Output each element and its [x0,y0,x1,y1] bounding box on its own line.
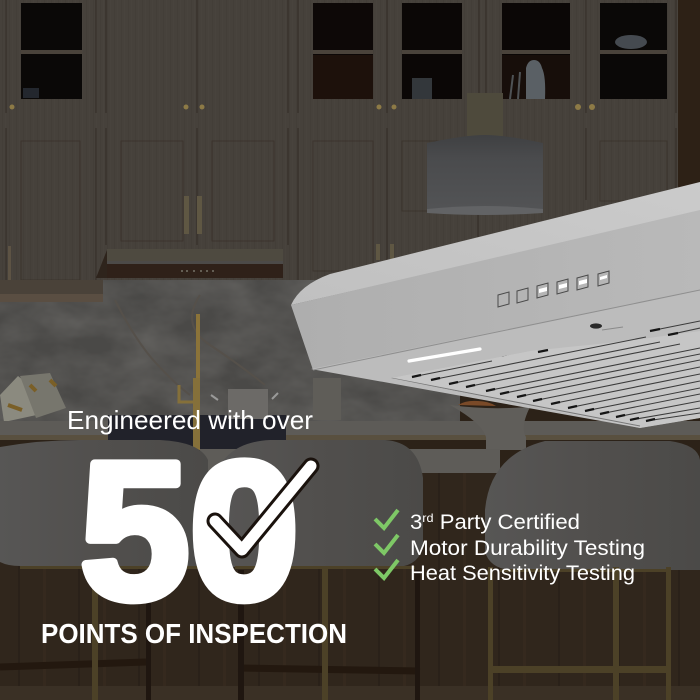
sensor [502,323,623,361]
list item: 3rd Party Certified: 3 [410,511,422,534]
bar stools [0,440,700,700]
countertop, pot and faucet [0,314,700,474]
list item: 3rd Party Certified: Party Certified [434,511,580,534]
marble backsplash [0,280,460,425]
list item: Motor Durability Testing: Motor Durability Testing [410,537,645,560]
glass cabinet doors [21,3,667,99]
testing list [375,510,645,585]
icon: inspection checkmark [215,466,311,550]
small range hood in background [96,249,283,278]
lower island wood panels [0,473,700,700]
cookbook on counter [0,373,66,422]
button lights [539,275,607,293]
stool: right seat [485,441,700,570]
hood front face [291,210,700,370]
stool: left seat [0,440,208,566]
list item: Heat Sensitivity Testing: Heat Sensitivity Testing [410,562,635,585]
background: upper cabinets [0,0,700,300]
stool: middle seat [213,440,423,567]
baffle filter [391,321,700,428]
icon: green check 2 [375,535,398,553]
subheading: POINTS OF INSPECTION: POINTS OF INSPECTION [41,618,347,649]
control buttons [498,271,609,307]
list item: 3rd Party Certified: rd [422,511,434,525]
icon: green check 1 [375,510,398,528]
stainless range hood [291,182,700,428]
icon: green check 3 [375,560,398,578]
stool legs [20,566,671,700]
lower cabinet panels [21,141,667,280]
knobs and handles [8,104,595,284]
big number 50 with checkmark: 50 [80,422,299,640]
hood underside [311,290,700,428]
hood top band [291,182,700,305]
pendant lamp [427,93,543,215]
heading: Engineered with over: Engineered with over [67,405,313,435]
LED light strip [409,349,480,361]
